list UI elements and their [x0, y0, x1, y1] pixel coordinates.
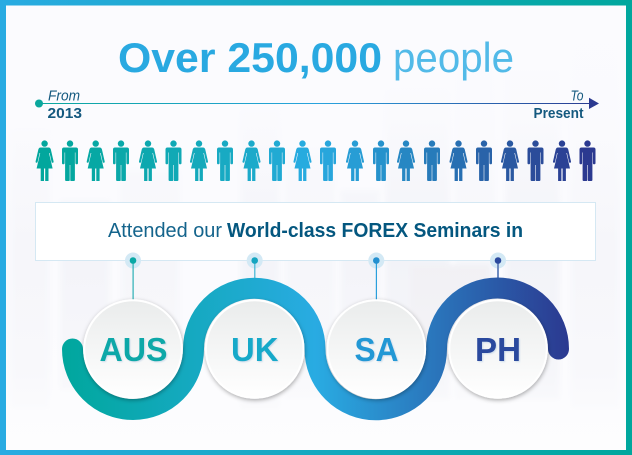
- location: SA: SA: [354, 331, 398, 368]
- timeline end label: To: [570, 88, 584, 104]
- location: SA: [328, 300, 425, 398]
- location: PH: PH: [475, 331, 521, 368]
- location: AUS: [84, 300, 182, 398]
- location: UK: [206, 300, 304, 398]
- connector: SA: [368, 252, 384, 300]
- winding ribbon: [72, 288, 558, 410]
- timeline end label: Present: [534, 106, 584, 122]
- pictogram row of 22 people: [36, 140, 596, 181]
- timeline start label: [48, 88, 82, 122]
- location: AUS: AUS: [100, 331, 168, 368]
- connector: UK: [247, 252, 263, 280]
- banner: [36, 202, 596, 260]
- title: [118, 34, 514, 81]
- title: people: [393, 34, 514, 81]
- timeline start label: From: [48, 88, 80, 104]
- timeline start label: 2013: [48, 105, 82, 122]
- location: UK: UK: [231, 331, 279, 368]
- banner text: World-class FOREX Seminars in: [227, 219, 523, 242]
- connector: PH: [490, 252, 506, 280]
- connector: AUS: [125, 252, 141, 300]
- banner text: Attended our: [108, 219, 222, 242]
- title: Over 250,000: [118, 34, 382, 81]
- location: PH: [449, 300, 547, 398]
- timeline end label: [534, 88, 584, 122]
- timeline arrow: [35, 98, 599, 109]
